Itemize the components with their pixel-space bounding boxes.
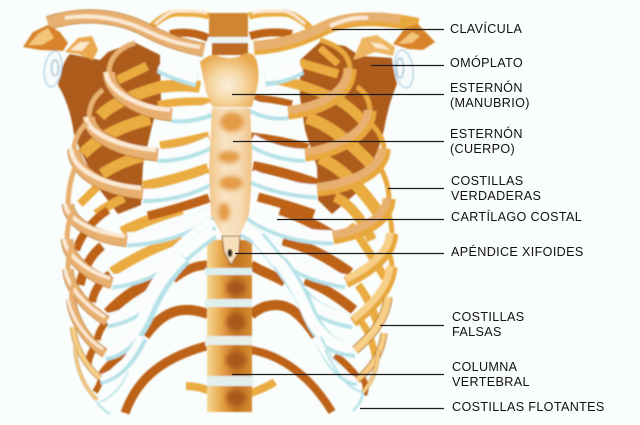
label: costillas flotantes: COSTILLAS FLOTANTES	[452, 400, 605, 414]
label: costillas falsas: FALSAS	[452, 325, 502, 339]
manubrium	[200, 53, 258, 107]
label: costillas falsas	[380, 310, 524, 339]
cartilages left	[97, 64, 213, 414]
label: apéndice xifoides: APÉNDICE XIFOIDES	[451, 244, 584, 259]
label: esternón cuerpo	[233, 126, 523, 156]
ribcage illustration	[23, 11, 435, 414]
front ribs right	[288, 40, 392, 392]
label: clavícula: CLAVÍCULA	[450, 21, 522, 36]
sternum	[200, 53, 258, 265]
label: columna vertebral: VERTEBRAL	[452, 375, 530, 389]
thoracic and lumbar vertebrae	[207, 240, 252, 412]
first ribs top	[150, 11, 310, 38]
label: costillas falsas: COSTILLAS	[452, 310, 524, 324]
right scapula	[300, 42, 397, 214]
label: costillas verdaderas: COSTILLAS	[451, 174, 523, 188]
back ribs right	[250, 48, 385, 395]
label: costillas verdaderas: VERDADERAS	[451, 189, 541, 203]
label: columna vertebral	[232, 360, 530, 389]
left scapula	[58, 42, 161, 214]
left acromion and coracoid	[23, 25, 98, 60]
label: esternón manubrio: (MANUBRIO)	[450, 96, 530, 110]
body of sternum	[209, 108, 252, 235]
cartilages right	[243, 65, 363, 411]
left glenoid cavity	[42, 50, 64, 88]
label: cartílago costal: CARTÍLAGO COSTAL	[451, 209, 582, 224]
label: esternón cuerpo: ESTERNÓN	[450, 126, 523, 141]
vertebral column	[205, 13, 253, 412]
right acromion and coracoid	[353, 24, 435, 60]
label: omóplato: OMÓPLATO	[450, 55, 523, 70]
clavicles	[48, 16, 418, 50]
label: esternón cuerpo: (CUERPO)	[450, 142, 515, 156]
label: columna vertebral: COLUMNA	[452, 360, 518, 374]
lower posterior ribs	[125, 265, 332, 413]
cervical vertebrae	[209, 13, 248, 38]
front ribs left	[64, 43, 172, 400]
orange bands between left cartilages	[143, 101, 212, 216]
back ribs left	[76, 66, 200, 392]
xiphoid process	[222, 236, 240, 265]
label: costillas verdaderas	[388, 174, 541, 203]
right glenoid cavity	[392, 49, 416, 89]
label: esternón manubrio	[232, 80, 530, 110]
label: esternón manubrio: ESTERNÓN	[450, 80, 523, 95]
